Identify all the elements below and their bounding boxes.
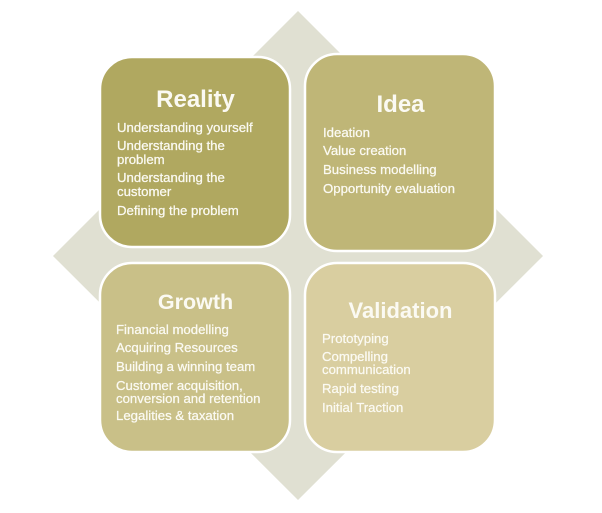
list: Growth items: Building a winning team xyxy=(116,359,255,374)
list: Idea items xyxy=(323,125,455,196)
list: Growth items: Legalities & taxation xyxy=(116,408,234,423)
list: Reality items xyxy=(117,120,253,218)
panel: Idea xyxy=(305,54,495,251)
heading: Growth: Growth xyxy=(158,290,233,314)
list: Idea items: Value creation xyxy=(323,143,406,158)
list: Reality items: Understanding the xyxy=(117,138,225,153)
list: Reality items: Defining the problem xyxy=(117,203,239,218)
list: Validation items: Compelling xyxy=(322,349,388,364)
panel: Reality xyxy=(100,57,290,247)
heading: Idea: Idea xyxy=(376,91,425,118)
list: Validation items xyxy=(322,331,411,415)
panel: Validation xyxy=(305,263,495,452)
list: Growth items: Customer acquisition, xyxy=(116,378,243,393)
list: Validation items: Prototyping xyxy=(322,331,389,346)
list: Reality items: Understanding the xyxy=(117,170,225,185)
list: Reality items: Understanding yourself xyxy=(117,120,253,135)
list: Validation items: Rapid testing xyxy=(322,381,399,396)
heading: Validation: Validation xyxy=(349,298,452,323)
list: Reality items: problem xyxy=(117,152,165,167)
background diamond xyxy=(53,11,543,500)
list: Idea items: Opportunity evaluation xyxy=(323,181,455,196)
list: Growth items: conversion and retention xyxy=(116,391,260,406)
heading: Reality: Reality xyxy=(156,86,236,113)
list: Reality items: customer xyxy=(117,184,172,199)
list: Growth items: Financial modelling xyxy=(116,322,229,337)
list: Idea items: Ideation xyxy=(323,125,370,140)
list: Growth items xyxy=(116,322,260,423)
list: Idea items: Business modelling xyxy=(323,162,437,177)
panel: Growth xyxy=(100,263,290,452)
list: Growth items: Acquiring Resources xyxy=(116,340,238,355)
list: Validation items: communication xyxy=(322,362,411,377)
list: Validation items: Initial Traction xyxy=(322,400,403,415)
